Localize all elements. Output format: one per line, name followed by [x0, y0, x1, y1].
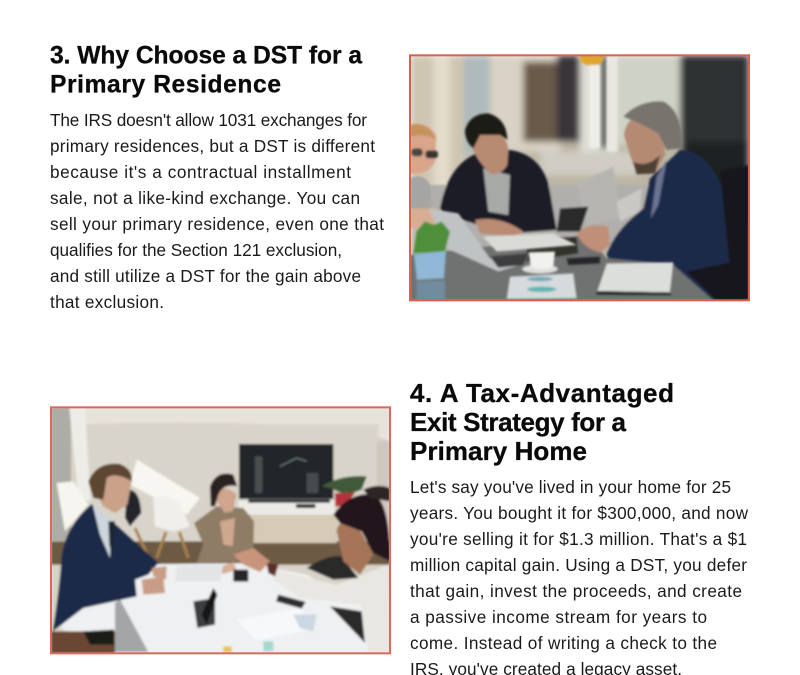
text block: section 4 body: that gain, invest the proceeds, and create — [410, 581, 742, 601]
table — [410, 235, 720, 300]
text block: section 3 body: primary residences, but a DST is different — [50, 136, 375, 156]
photo: three colleagues at an office table — [409, 54, 750, 302]
plant — [413, 222, 450, 253]
handshake — [233, 548, 270, 572]
text block: section 3 body: sell your primary residence, even one that — [50, 214, 384, 234]
text block: section 3 body: sale, not a like-kind exchange. You can — [50, 188, 360, 208]
woman centre — [194, 506, 254, 563]
sofa and cushions — [430, 185, 650, 248]
text block: section 3 body: and still utilize a DST for the gain above — [50, 266, 361, 286]
text block: section 3 body: that exclusion. — [50, 292, 164, 312]
photo frame — [410, 55, 749, 300]
text block: section 4 body: a passive income stream for years to — [410, 607, 707, 627]
plant — [322, 476, 367, 495]
white table — [60, 563, 390, 653]
text block: section 4 body: you're selling it for $1.3 million. That's a $1 — [410, 529, 747, 549]
background: blurred glass office — [411, 56, 748, 260]
laptop — [428, 208, 525, 272]
text block: section 3 body: The IRS doesn't allow 1031 exchanges for — [50, 110, 367, 130]
photo: business handshake at a white table — [50, 406, 391, 654]
heading: section 4 — [410, 378, 674, 466]
heading: section 3: Primary Residence — [50, 72, 281, 98]
text block: section 3 body: qualifies for the Section 121 exclusion, — [50, 240, 342, 260]
heading: section 4: 4. A Tax-Advantaged — [410, 378, 674, 408]
TV — [239, 444, 333, 499]
man right — [273, 565, 390, 653]
text block: section 4 body: million capital gain. Using a DST, you defer — [410, 555, 747, 575]
text block: section 4 body: years. You bought it for $300,000, and now — [410, 503, 749, 523]
man left — [53, 504, 158, 631]
heading: section 4: Primary Home — [410, 436, 587, 466]
heading: section 4: Exit Strategy for a — [410, 407, 627, 437]
man centre — [440, 150, 557, 233]
papers — [483, 233, 577, 252]
text block: section 3 body: because it's a contractual installment — [50, 162, 351, 182]
section 4: tax-advantaged exit strategy — [410, 378, 749, 675]
background: bright office wall — [51, 407, 390, 653]
floor, console and chairs — [51, 541, 390, 565]
photo frame — [51, 407, 390, 653]
text block: section 4 body: Let's say you've lived in your home for 25 — [410, 477, 731, 497]
heading: section 3: 3. Why Choose a DST for a — [50, 42, 362, 70]
items on table — [233, 570, 248, 582]
text block: section 3 body — [50, 110, 384, 312]
heading: section 3 — [50, 42, 362, 98]
text block: section 4 body — [410, 477, 749, 675]
woman left — [410, 176, 432, 210]
section 3: why choose a DST — [50, 42, 384, 312]
man right — [606, 149, 731, 300]
text block: section 4 body: come. Instead of writing a check to the — [410, 633, 717, 653]
cup — [522, 264, 558, 274]
